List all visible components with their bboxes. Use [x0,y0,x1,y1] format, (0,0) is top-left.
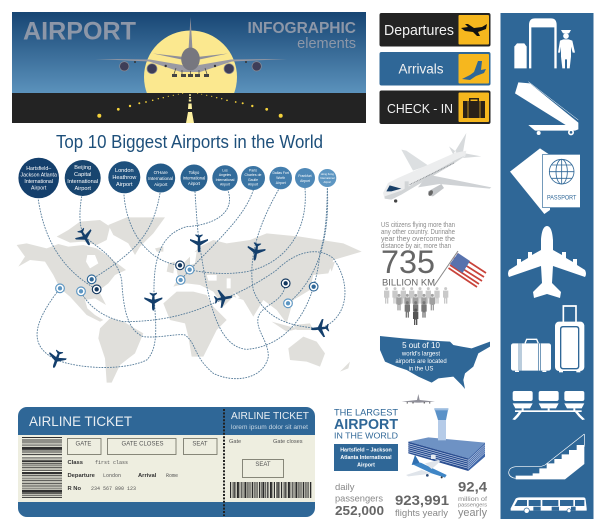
banner subtitle: INFOGRAPHIC [248,20,356,37]
stat: million passengers: million of [458,496,487,503]
bubble: O'Hare: International [148,176,173,181]
ticket details: Class [68,460,83,466]
stub heading: lorem ipsum dolor sit amet [231,424,308,431]
bubble: Los Angeles: International [216,178,235,182]
stat: daily passengers: passengers [335,494,383,504]
bubble: Heathrow: Heathrow [112,175,137,181]
bubble: Paris: Gaulle [248,178,258,182]
bubble: Heathrow: Airport [116,182,133,188]
passenger jet illustration [383,133,491,203]
ticket values: London [103,473,121,479]
icon: airplane [508,226,586,298]
ticket values: first class [95,460,128,466]
bubble: Frankfurt [295,168,315,188]
bubble: Paris: Charles de [245,173,262,177]
sun [144,30,237,93]
bubble: Los Angeles [212,165,238,191]
stat: million passengers: passengers [458,502,487,508]
airport markers [56,261,318,308]
bubble: Frankfurt: Airport [300,179,310,183]
bubble: Beijing: Beijing [74,165,91,171]
bubble: Tokyo: International [183,176,205,180]
gate labels: SEAT [192,442,208,448]
icon: boarding stairs [515,82,578,135]
largest airport section [334,394,487,519]
ticket details: Departure [68,473,96,479]
banner subtitle: elements [297,36,356,52]
stat paragraph: year they overcome the [381,234,455,243]
bubble: Tokyo: Tokyo [189,170,200,175]
stub heading: AIRLINE TICKET [231,410,310,422]
bubble: Dallas: Airport [276,181,286,185]
bubble: Los Angeles: Airport [220,182,230,186]
icon: airport bus [511,497,587,513]
stat: million passengers: yearly [458,507,487,519]
perforation [223,409,225,516]
stub labels: Gate [229,439,241,445]
bubble: Dallas: Dallas Fort [272,171,289,175]
gate labels: SEAT [255,462,271,468]
sign: arrivals: Arrivals [398,62,444,76]
banner subtitle [248,20,356,52]
bubble: Atlanta: International [24,179,53,185]
bubble: Paris: Paris [249,168,257,172]
airport name box [334,444,398,471]
gate labels [76,442,271,468]
bubble: Hong Kong: Hong Kong [321,172,334,176]
bubble: Hong Kong: International [320,176,335,180]
airport name box: Hartsfield – Jackson [340,448,392,454]
bubble: O'Hare [146,164,175,192]
airliner front view [95,17,287,77]
bubble: Los Angeles: Angeles [219,173,231,177]
stat: flights yearly: flights yearly [395,508,448,518]
stub labels: Gate closes [273,439,303,445]
USA map callout: 5 out of 10 [402,341,440,350]
stat paragraph: distance by air, more than [381,241,451,250]
terminal and tower [408,408,485,471]
small plane overhead [402,394,435,403]
bubble: Beijing: International [67,179,98,185]
stat: flights yearly: 923,991 [395,492,449,508]
bubble: Atlanta: Airport [31,186,47,192]
stat: million passengers: 92,4 [458,479,487,495]
sign: departures: Departures [384,22,454,39]
ticket values [91,460,178,492]
section heading [334,407,399,440]
icon: escalator [509,434,584,479]
icon column panel [500,13,594,519]
ticket details: Arrival [138,473,157,479]
continents [17,217,362,383]
seas cut out of land [86,252,240,298]
world route map [17,188,362,383]
stub labels [229,439,303,445]
US flag [434,251,487,288]
ticket details [68,460,157,492]
header banner [12,12,366,124]
icon: luggage [511,306,584,372]
airport name box: Airport [357,462,375,468]
bubble: Heathrow [108,161,140,193]
bubble: Tokyo [180,164,208,192]
bubble: Hong Kong [318,169,336,187]
USA map callout: in the US [409,367,433,373]
chart title: Top 10 Biggest Airports in the World [56,132,323,152]
bubble: Dallas [269,167,292,189]
icon: passport and ticket [510,148,580,214]
bubble: Los Angeles: Los [222,168,228,172]
stat: daily passengers: daily [335,482,355,493]
section heading: THE LARGEST [334,407,399,417]
billion km: BILLION KM [382,278,435,289]
bubble: Beijing: Capital [74,172,91,178]
ticket heading: AIRLINE TICKET [29,413,132,429]
bubble: Beijing: Airport [74,186,91,192]
gate labels: GATE [76,442,91,448]
stat: daily passengers [335,482,384,518]
gate boxes [68,438,284,478]
gate labels: GATE CLOSES [122,442,163,448]
USA map callout: world's largest [401,352,440,358]
bubble: Hong Kong: Airport [323,180,331,184]
icon: waiting seats [512,391,585,420]
section heading: IN THE WORLD [334,430,398,440]
stat: million passengers [458,479,487,519]
route planes [45,225,330,371]
flight board signs [380,13,490,124]
bubble: Tokyo: Airport [188,181,201,186]
bubble: Beijing [65,160,101,196]
stat paragraph [381,220,455,250]
banner title: AIRPORT [23,18,136,46]
bubble: Heathrow: London [115,168,134,174]
bubble: Dallas: Worth [276,176,285,180]
bubble: Atlanta: Hartsfield– [26,166,51,172]
section heading: AIRPORT [334,417,398,433]
right barcode [230,482,312,498]
US statistics [380,220,490,389]
icon: passport and ticket: PASSPORT [547,194,576,201]
stub heading [231,410,310,431]
bubble: O'Hare: Airport [154,182,168,187]
stat: flights yearly [395,492,449,518]
sign: check-in: CHECK - IN [387,102,453,116]
runway [12,93,366,123]
icon: security gate and guard [514,18,575,68]
bubble: Atlanta [18,158,59,198]
people pictogram [384,287,448,325]
stat: daily passengers: 252,000 [335,504,384,518]
ticket details: R No [68,486,81,492]
stat paragraph: any other country. Durinahe [381,227,455,236]
left barcode [22,437,62,499]
USA map callout [380,336,490,389]
USA map callout: airports are located [395,359,447,365]
bubble: Paris [241,166,265,190]
airport name box: Atlanta International [340,455,392,461]
bubble: Paris: Airport [248,182,258,186]
ticket values: 234 567 890 123 [91,486,136,492]
735 figure: 735 [381,244,435,280]
parked blue plane [406,455,447,478]
bubble: O'Hare: O'Hare [154,170,168,175]
dotted routes [37,188,345,379]
bubble: Frankfurt: Frankfurt [298,174,312,178]
airline ticket [18,407,315,517]
ticket values: Rome [166,473,178,479]
airport bubbles [18,158,336,198]
stat paragraph: US citizens flying more than [381,220,455,229]
bubble: Atlanta: Jackson Atlanta [21,172,57,178]
